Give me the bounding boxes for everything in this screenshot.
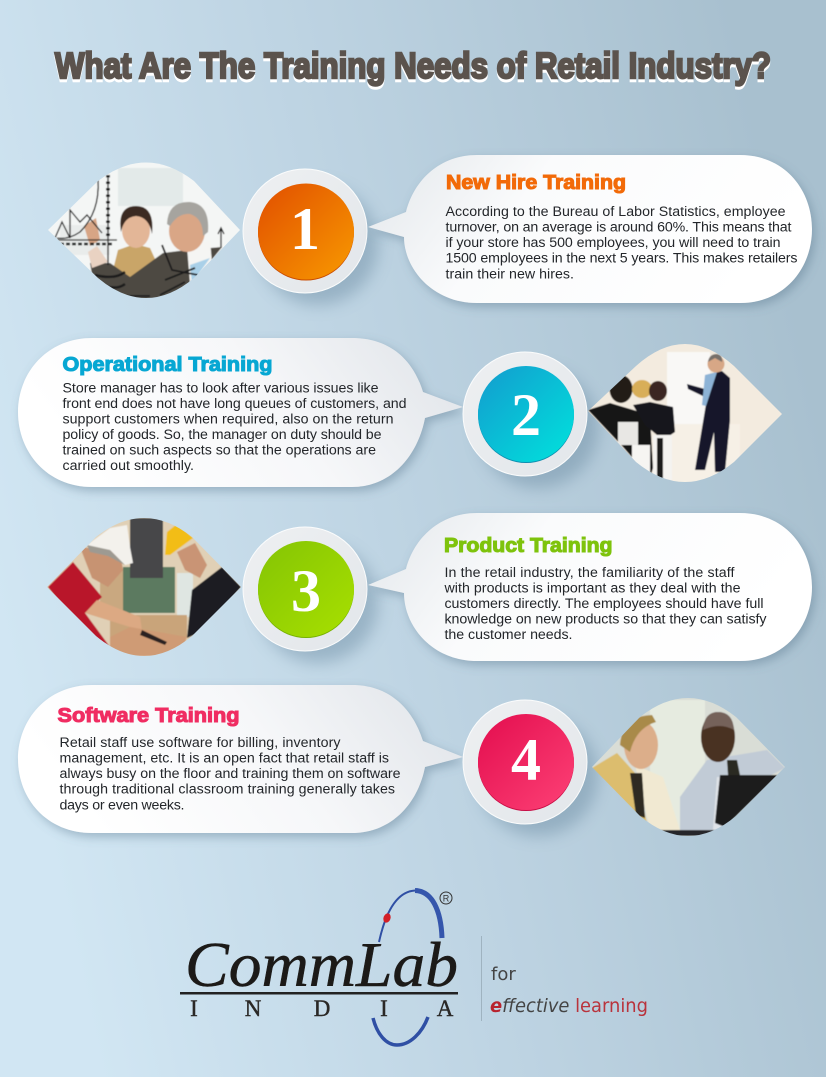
speech bubble 4 (18, 685, 463, 833)
photo: trainers at glass chart (48, 162, 240, 298)
photo: electricians at panel (47, 518, 241, 656)
logo wordmark: CommLab (185, 929, 458, 1000)
body text 4 (60, 735, 401, 814)
body text 1 (446, 204, 798, 282)
body text 1: turnover, on an average is around 60%. This means that (446, 220, 792, 236)
body text 3: with products is important as they deal with the (444, 580, 741, 596)
step 4: software training (18, 685, 795, 845)
body text 1: According to the Bureau of Labor Statistics, employee (446, 204, 786, 220)
logo registered mark (440, 892, 452, 904)
body text 4: always busy on the floor and training them on software (60, 766, 401, 782)
heading: software training: Software Training (58, 704, 240, 727)
logo India letters (190, 996, 454, 1021)
number badge 2: 2 (511, 382, 541, 448)
heading: new hire training: New Hire Training (446, 171, 626, 194)
logo India letters: A (437, 996, 454, 1021)
logo India letters: I (380, 996, 388, 1021)
logo India letters: I (190, 996, 198, 1021)
body text 4: days or even weeks. (60, 798, 184, 814)
speech bubble 3 (368, 513, 812, 661)
step 3: product training (40, 510, 812, 665)
body text 4: Retail staff use software for billing, inventory (60, 735, 341, 751)
body text 1: if your store has 500 employees, you will need to train (446, 235, 780, 251)
logo India letters: N (245, 996, 262, 1021)
tagline (490, 964, 648, 1017)
body text 2: Store manager has to look after various issues like (62, 380, 379, 396)
logo red dot (382, 912, 392, 924)
body text 2: trained on such aspects so that the operations are (62, 442, 376, 458)
body text 1: train their new hires. (446, 266, 574, 282)
body text 3: knowledge on new products so that they can satisfy (444, 612, 767, 628)
logo India letters: D (314, 996, 330, 1021)
number badge 3: 3 (291, 558, 321, 624)
tagline: effective learning (490, 995, 648, 1017)
logo arcs (373, 890, 442, 1045)
body text 2: carried out smoothly. (62, 458, 194, 474)
logo registered mark: R (443, 894, 450, 904)
body text 2 (62, 380, 406, 474)
body text 3: customers directly. The employees should have full (444, 596, 764, 612)
body text 2: policy of goods. So, the manager on duty should be (62, 427, 382, 443)
tagline: for (491, 964, 516, 985)
body text 4: management, etc. It is an open fact that retail staff is (60, 750, 389, 766)
body text 4: through traditional classroom training generally takes (60, 782, 395, 798)
speech bubble 2 (18, 338, 463, 487)
step 2: operational training (18, 335, 790, 495)
photo: classroom presentation (588, 344, 782, 482)
number badge 1: 1 (290, 196, 320, 262)
body text 2: front end does not have long queues of customers, and (62, 396, 406, 412)
body text 2: support customers when required, also on the return (62, 412, 394, 428)
step 1: new hire training (40, 155, 812, 310)
number badge 4 (463, 700, 598, 836)
photo: colleagues at monitor (592, 698, 785, 836)
body text 3: the customer needs. (444, 627, 572, 643)
body text 3: In the retail industry, the familiarity of the staff (444, 565, 735, 581)
speech bubble 1 (368, 155, 812, 303)
number badge 3 (243, 527, 378, 663)
number badge 4: 4 (511, 727, 541, 793)
number badge 2 (463, 352, 598, 488)
heading: operational training: Operational Training (62, 353, 272, 376)
number badge 1 (243, 169, 378, 305)
heading: product training: Product Training (444, 534, 612, 557)
body text 3 (444, 565, 767, 643)
logo: CommLab India (180, 890, 458, 1045)
body text 1: 1500 employees in the next 5 years. This makes retailers (446, 250, 798, 266)
